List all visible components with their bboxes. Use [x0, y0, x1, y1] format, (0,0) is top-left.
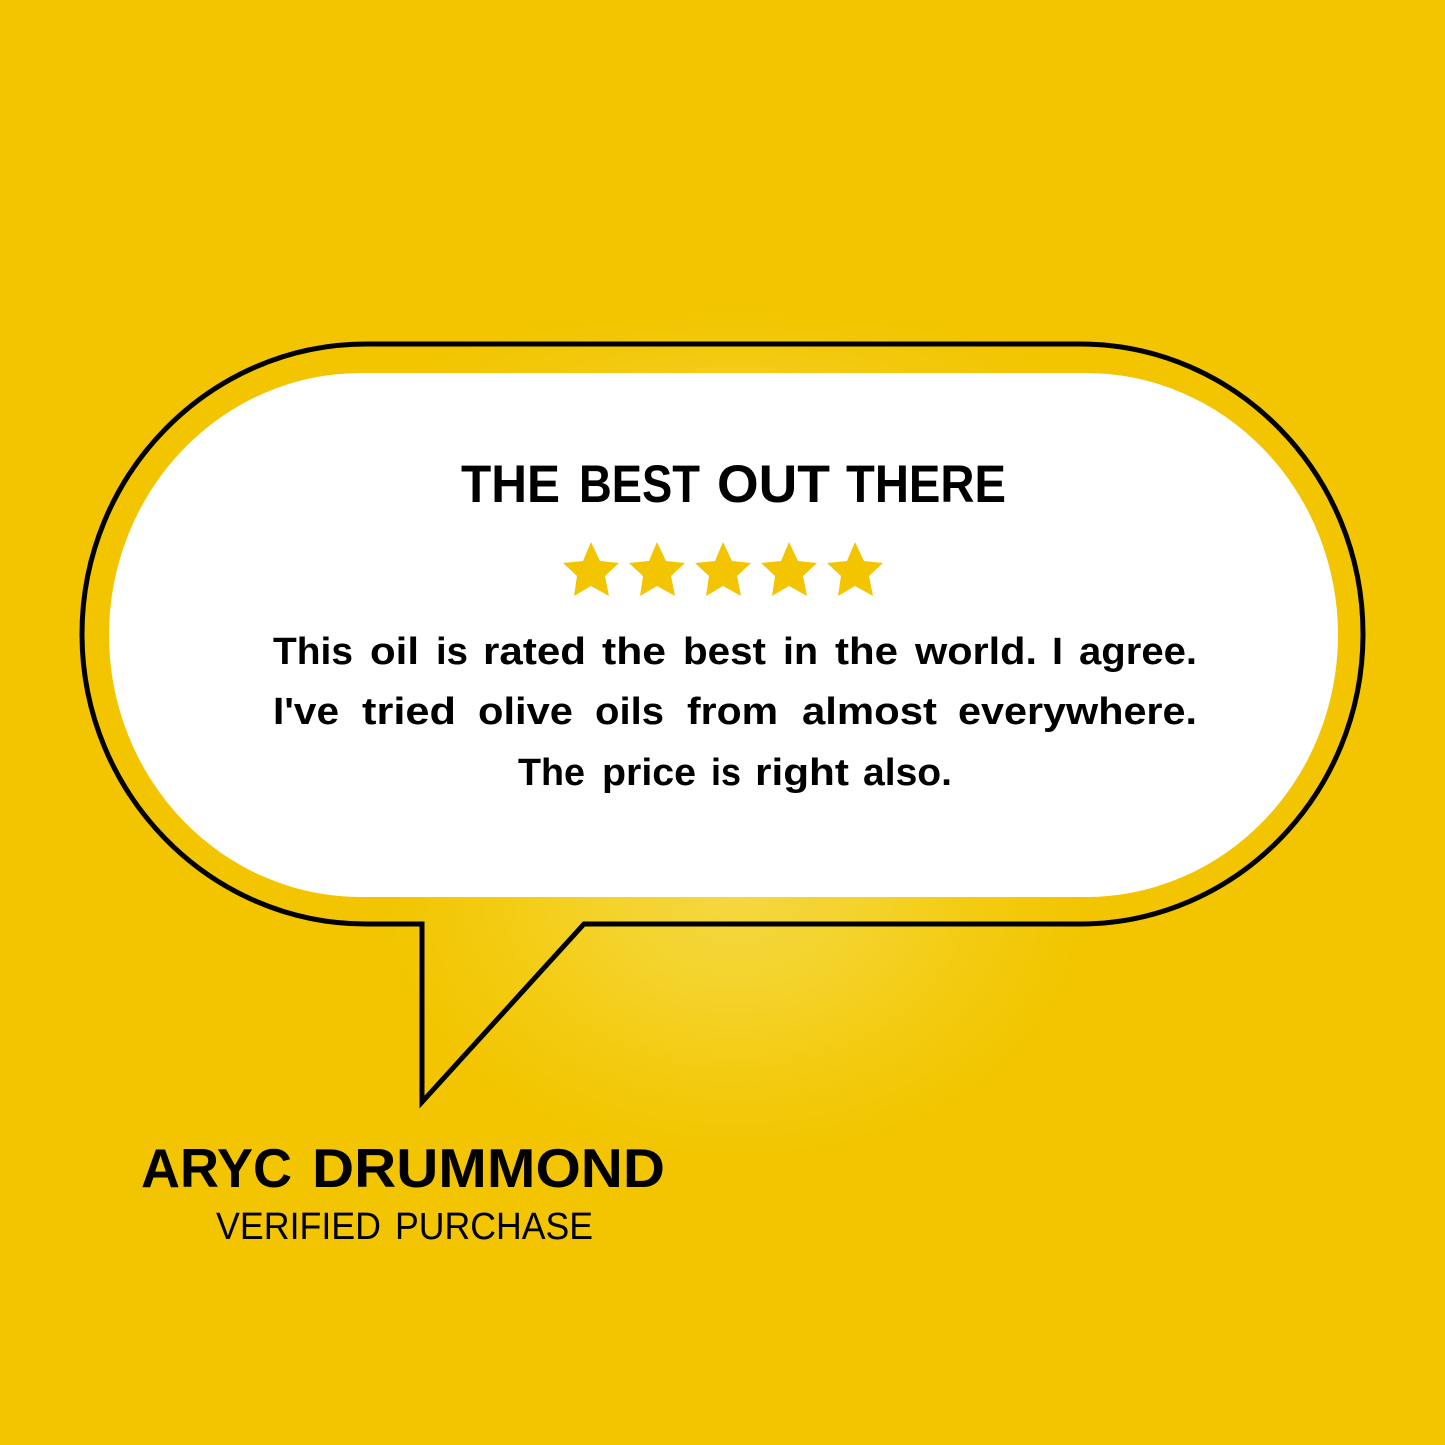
review text: tried — [362, 691, 456, 733]
reviewer name — [141, 1137, 665, 1199]
review text — [273, 631, 1197, 794]
review text: oil — [370, 631, 419, 673]
title: OUT — [717, 455, 830, 514]
verified purchase label: VERIFIED — [216, 1206, 381, 1248]
review text: I — [1052, 631, 1063, 673]
review text: the — [602, 631, 666, 673]
review text: is — [711, 752, 741, 794]
background glow below bubble — [370, 620, 1100, 1165]
title — [461, 455, 1006, 514]
title: THERE — [846, 455, 1006, 514]
review text: in — [783, 631, 818, 673]
review text: everywhere. — [958, 691, 1197, 733]
icon: five star rating — [563, 542, 883, 596]
review text: almost — [802, 691, 937, 733]
review text: agree. — [1079, 631, 1197, 673]
review text: is — [436, 631, 468, 673]
review text: The — [518, 752, 585, 794]
review text: oils — [595, 691, 664, 733]
title: THE — [461, 455, 560, 514]
review text: from — [687, 691, 778, 733]
verified purchase label: PURCHASE — [395, 1206, 593, 1248]
review text: the — [835, 631, 898, 673]
review text: also. — [863, 752, 952, 794]
review text: This — [273, 631, 353, 673]
review text: price — [602, 752, 696, 794]
review text: right — [755, 752, 849, 794]
white bubble panel — [109, 373, 1338, 897]
background glow above bubble — [400, 310, 1070, 385]
speech bubble outline — [82, 344, 1363, 1102]
review text: rated — [483, 631, 586, 673]
verified purchase label — [216, 1206, 593, 1248]
review text: best — [683, 631, 766, 673]
review text: I've — [273, 691, 339, 733]
review text: olive — [478, 691, 573, 733]
title: BEST — [579, 455, 700, 514]
reviewer name: DRUMMOND — [312, 1137, 665, 1199]
reviewer name: ARYC — [141, 1137, 292, 1199]
review text: world. — [914, 631, 1037, 673]
